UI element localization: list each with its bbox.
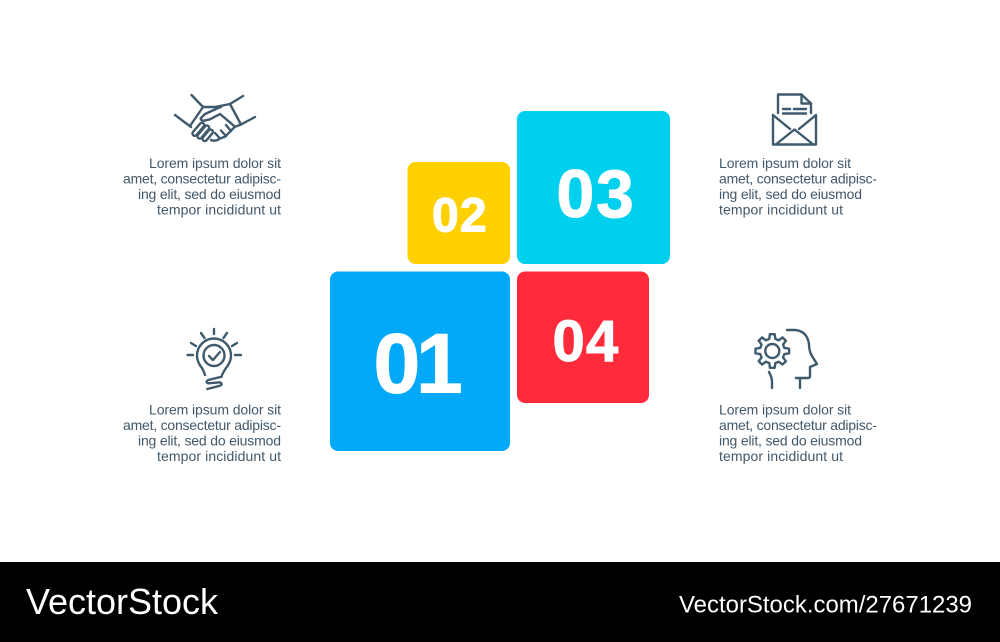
square 04 (517, 272, 649, 403)
text block: bottom right (719, 402, 877, 464)
square 01 (330, 272, 510, 451)
text block: bottom left: amet, consectetur adipisc- (123, 417, 281, 433)
text block: top right: Lorem ipsum dolor sit (719, 155, 851, 171)
footer image id: VectorStock.com/27671239 (679, 592, 972, 618)
square 03: 03 (556, 156, 634, 232)
text block: top right: tempor incididunt ut (719, 202, 843, 218)
text block: bottom left: tempor incididunt ut (157, 448, 281, 464)
icon: head with gear (755, 330, 817, 388)
icon: light bulb with check (188, 329, 241, 389)
text block: bottom left: Lorem ipsum dolor sit (149, 402, 281, 418)
text block: top right: amet, consectetur adipisc- (719, 170, 877, 186)
text block: top left: ing elit, sed do eiusmod (138, 186, 281, 202)
text block: bottom right: tempor incididunt ut (719, 448, 843, 464)
text block: top left: tempor incididunt ut (157, 202, 281, 218)
text block: bottom left (123, 402, 281, 464)
square 01: 01 (374, 316, 463, 410)
text block: top left: Lorem ipsum dolor sit (149, 155, 281, 171)
text block: top left (123, 155, 281, 218)
footer bar (0, 562, 1000, 642)
square 02: 02 (432, 190, 487, 242)
icon: handshake (175, 95, 255, 142)
square 03 (517, 111, 670, 264)
text block: bottom left: ing elit, sed do eiusmod (138, 432, 281, 448)
text block: bottom right: amet, consectetur adipisc- (719, 417, 877, 433)
text block: top right: ing elit, sed do eiusmod (719, 186, 862, 202)
square 02 (408, 162, 510, 264)
text block: top left: amet, consectetur adipisc- (123, 170, 281, 186)
square 04: 04 (552, 309, 618, 374)
text block: bottom right: Lorem ipsum dolor sit (719, 402, 851, 418)
icon: envelope with document (773, 94, 816, 144)
footer logo: VectorStock (26, 581, 219, 622)
text block: bottom right: ing elit, sed do eiusmod (719, 432, 862, 448)
text block: top right (719, 155, 877, 218)
